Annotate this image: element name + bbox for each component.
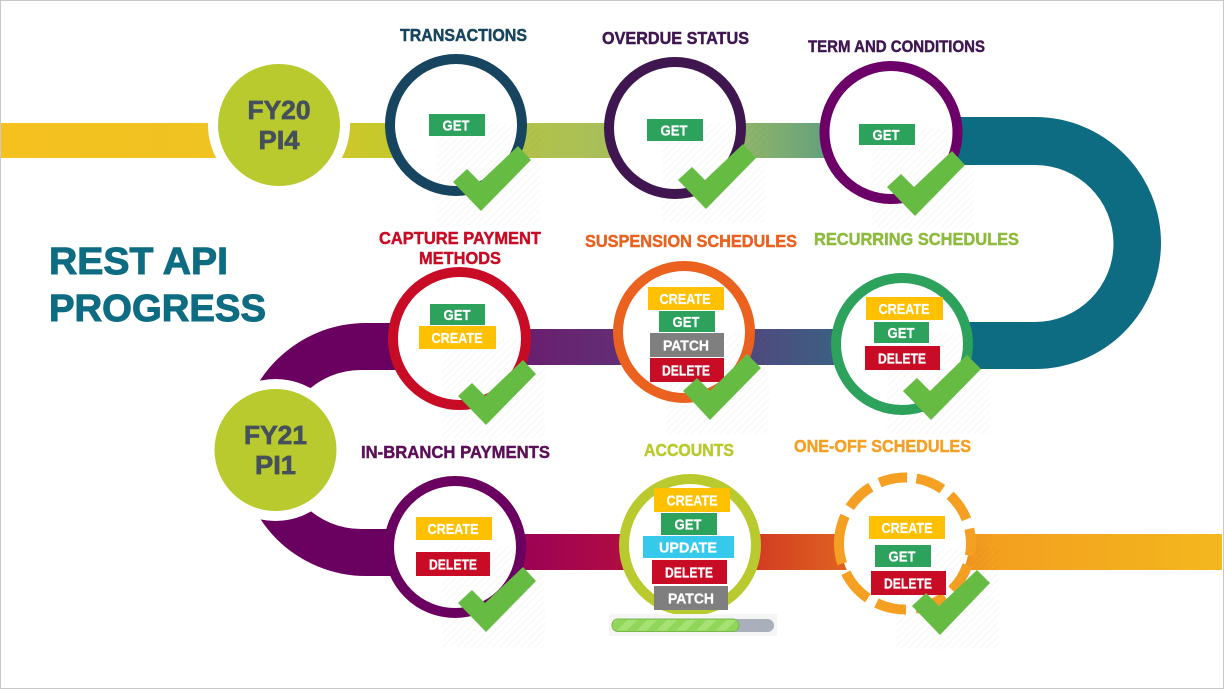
heading: one-off schedules: ONE-OFF SCHEDULES: [794, 436, 971, 456]
heading: recurring schedules: RECURRING SCHEDULES: [814, 229, 1019, 249]
badge: get: [659, 311, 715, 332]
arrow band: middle row: [500, 329, 850, 365]
milestone FY20 PI4: FY20: [248, 95, 310, 125]
milestone FY21 PI1: [204, 379, 346, 521]
badge: create: CREATE: [660, 291, 710, 308]
progress bar: [609, 614, 777, 636]
badge: create: CREATE: [882, 520, 932, 537]
badge: get: [859, 124, 915, 145]
icon: check: [903, 355, 981, 420]
icon: check: [678, 144, 756, 209]
node: one-off schedules: [829, 467, 999, 649]
badge: create: CREATE: [878, 301, 930, 318]
badge: delete: DELETE: [662, 362, 710, 380]
badge: delete: DELETE: [665, 564, 713, 582]
arrow band: top row: [1, 123, 961, 158]
icon: check: [458, 567, 536, 632]
node: transactions: [390, 59, 540, 225]
badge: get: [430, 304, 485, 325]
badge: get: GET: [872, 127, 900, 144]
badge: delete: [650, 358, 724, 382]
heading: transactions: TRANSACTIONS: [400, 25, 527, 45]
heading: in-branch payments: IN-BRANCH PAYMENTS: [361, 442, 550, 462]
node: in-branch payments: [389, 481, 545, 647]
title: REST API: [49, 241, 228, 283]
badge: create: [866, 297, 943, 320]
title: [49, 241, 266, 330]
badge: get: [647, 119, 703, 141]
heading: term and conditions: TERM AND CONDITIONS: [808, 38, 985, 56]
badge: get: GET: [660, 122, 688, 140]
badge: get: GET: [888, 548, 916, 566]
heading: accounts: ACCOUNTS: [644, 440, 734, 460]
badge: create: CREATE: [428, 521, 478, 538]
badge: delete: [865, 346, 940, 370]
badge: delete: DELETE: [878, 350, 926, 368]
badge: patch: PATCH: [663, 338, 709, 354]
icon: check: [453, 146, 531, 211]
badge: get: GET: [674, 516, 702, 534]
milestone FY21 PI1: FY21: [244, 420, 307, 450]
heading: capture payment methods: CAPTURE PAYMENT: [379, 228, 541, 248]
badge: delete: DELETE: [884, 576, 932, 592]
heading: overdue status: OVERDUE STATUS: [602, 28, 749, 48]
node: overdue status: [609, 62, 765, 223]
badge: update: UPDATE: [659, 540, 717, 556]
badge: get: GET: [888, 325, 914, 342]
heading: suspension schedules: SUSPENSION SCHEDULES: [585, 231, 797, 251]
icon: check: [912, 570, 990, 635]
badge: delete: [416, 552, 490, 576]
icon: check: [683, 354, 761, 420]
badge: get: [429, 114, 485, 136]
node: accounts: [624, 479, 756, 611]
arrow band: right teal curve: [950, 117, 1161, 369]
badge: create: CREATE: [432, 330, 482, 347]
badge: get: GET: [442, 118, 470, 134]
badge: get: [874, 322, 929, 343]
badge: create: [648, 287, 724, 310]
node: capture payment methods: [393, 272, 545, 439]
icon: check: [887, 151, 965, 216]
badge: delete: [871, 571, 946, 595]
heading: capture payment methods: METHODS: [419, 248, 501, 268]
node: suspension schedules: [618, 266, 769, 434]
milestone FY20 PI4: [208, 54, 350, 196]
badge: create: [869, 516, 945, 539]
heading: capture payment methods: [379, 228, 541, 268]
arrow band: bottom row: [500, 534, 1222, 570]
badge: patch: PATCH: [668, 590, 714, 608]
badge: create: [419, 326, 496, 349]
badge: create: [416, 517, 492, 540]
node: recurring schedules: [836, 278, 990, 434]
arrow band: left purple curve: [240, 323, 400, 576]
title: PROGRESS: [49, 288, 266, 330]
badge: get: GET: [672, 314, 700, 331]
badge: get: [875, 545, 931, 567]
milestone FY20 PI4: PI4: [258, 125, 300, 155]
milestone FY21 PI1: PI1: [255, 450, 296, 480]
node: term and conditions: [824, 66, 974, 230]
badge: patch: [650, 333, 724, 357]
icon: check: [458, 360, 536, 425]
badge: create: CREATE: [666, 492, 718, 510]
badge: delete: DELETE: [429, 556, 477, 574]
badge: get: GET: [444, 307, 470, 324]
